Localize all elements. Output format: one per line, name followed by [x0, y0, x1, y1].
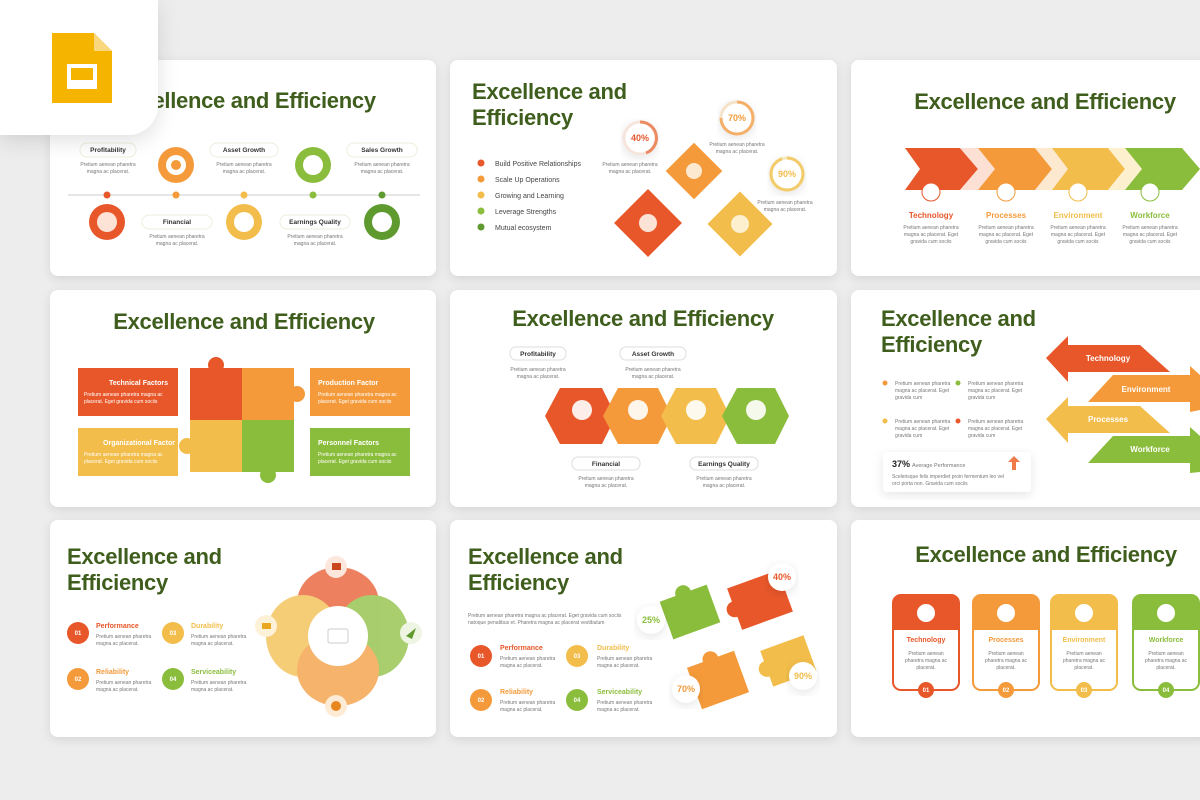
card 7: venn: 04: [170, 677, 177, 683]
card 9: column cards: 04: [1163, 688, 1170, 694]
card 3: chevrons: Environment: [1054, 211, 1103, 220]
card 9: column cards: Pretium aenean: [908, 651, 944, 657]
card 8: puzzle 4 percentages: 02: [478, 698, 485, 704]
card 2: puzzle percentages: Growing and Learning: [495, 193, 564, 200]
card 8: puzzle 4 percentages: magna ac placerat.: [597, 663, 640, 669]
card 6: arrows: Workforce: [1130, 445, 1170, 454]
card 6: arrows: 37%: [892, 459, 910, 469]
card 9: column cards: Pretium aenean: [1066, 651, 1102, 657]
card 9: column cards: [851, 520, 1200, 737]
card 6: arrows: magna ac placerat. Eget: [895, 426, 950, 432]
card 4: 2x2 puzzle: [50, 290, 436, 507]
card 2: puzzle percentages: 90%: [778, 169, 796, 179]
card 2: puzzle percentages: [450, 60, 837, 276]
card 3: chevrons: gravida cum sociis: [910, 239, 952, 245]
card 1: timeline: [50, 60, 436, 276]
card 8: puzzle 4 percentages: natoque penatibus et. Pharetra magna ac placerat vestibulum: [468, 620, 604, 626]
card 1: timeline: magna ac placerat.: [294, 241, 336, 247]
card 2: puzzle percentages: 70%: [728, 113, 746, 123]
card 2: puzzle percentages: Pretium aenean pharetra: [709, 142, 765, 148]
card 1: timeline: magna ac placerat.: [223, 169, 265, 175]
card 4: 2x2 puzzle: Pretium aenean pharetra magna ac: [318, 452, 397, 458]
card 8: puzzle 4 percentages: Pretium aenean pharetra: [500, 656, 556, 662]
card 8: puzzle 4 percentages: magna ac placerat.: [500, 663, 543, 669]
card 8: puzzle 4 percentages: 40%: [773, 572, 791, 582]
card 8: puzzle 4 percentages: Pretium aenean pharetra magna ac placerat. Eget gravida cum sociis: [468, 613, 622, 619]
card 2: puzzle percentages: Pretium aenean pharetra: [602, 162, 658, 168]
card 7: venn: magna ac placerat.: [191, 641, 234, 647]
card 6: arrows: Pretium aenean pharetra: [895, 381, 951, 387]
card 5: hexagons: magna ac placerat.: [703, 483, 745, 489]
card 2: puzzle percentages: 40%: [631, 133, 649, 143]
card 6: arrows: Pretium aenean pharetra: [968, 419, 1024, 425]
card 5: hexagons: magna ac placerat.: [517, 374, 559, 380]
card 4: 2x2 puzzle: Pretium aenean pharetra magna ac: [84, 392, 163, 398]
card 2: puzzle percentages: magna ac placerat.: [764, 207, 806, 213]
card 8: puzzle 4 percentages: 70%: [677, 684, 695, 694]
card 6: arrows: gravida cum: [968, 433, 995, 439]
card 3: chevrons: gravida cum sociis: [1129, 239, 1171, 245]
card 9: column cards: placerat.: [916, 665, 936, 671]
card 6: arrows: gravida cum: [968, 395, 995, 401]
card 7: venn: Efficiency: [67, 570, 169, 595]
card 6: arrows: gravida cum: [895, 433, 922, 439]
card 9: column cards: placerat.: [1156, 665, 1176, 671]
card 9: column cards: 02: [1003, 688, 1010, 694]
card 2: puzzle percentages: Mutual ecosystem: [495, 225, 552, 232]
card 7: venn: Pretium aenean pharetra: [96, 680, 152, 686]
card 9: column cards: Pretium aenean: [988, 651, 1024, 657]
card 1: timeline: magna ac placerat.: [156, 241, 198, 247]
card 2: puzzle percentages: Build Positive Relationships: [495, 161, 581, 168]
card 5: hexagons: Asset Growth: [632, 351, 674, 358]
card 5: hexagons: magna ac placerat.: [632, 374, 674, 380]
card 6: arrows: Scelerisque felis imperdiet proin fermentum leo vel: [892, 474, 1004, 480]
card 9: column cards: pharetra magna ac: [1145, 658, 1187, 664]
card 4: 2x2 puzzle: placerat. Eget gravida cum sociis: [318, 459, 392, 465]
card 4: 2x2 puzzle: Excellence and Efficiency: [113, 309, 376, 334]
card 3: chevrons: magna ac placerat. Eget: [904, 232, 959, 238]
card 7: venn: 01: [75, 631, 82, 637]
card 2: puzzle percentages: Leverage Strengths: [495, 209, 557, 216]
card 4: 2x2 puzzle: Pretium aenean pharetra magna ac: [318, 392, 397, 398]
card 7: venn: magna ac placerat.: [96, 687, 139, 693]
card 5: hexagons: Pretium aenean pharetra: [696, 476, 752, 482]
card 8: puzzle 4 percentages: Efficiency: [468, 570, 570, 595]
card 5: hexagons: Profitability: [520, 351, 556, 358]
card 1: timeline: Financial: [163, 219, 191, 226]
card 9: column cards: pharetra magna ac: [905, 658, 947, 664]
card 8: puzzle 4 percentages: Serviceability: [597, 689, 642, 696]
card 3: chevrons: Technology: [909, 211, 954, 220]
card 1: timeline: Pretium aenean pharetra: [149, 234, 205, 240]
card 9: column cards: placerat.: [996, 665, 1016, 671]
card 5: hexagons: Earnings Quality: [698, 461, 750, 468]
card 6: arrows: Pretium aenean pharetra: [895, 419, 951, 425]
card 8: puzzle 4 percentages: Reliability: [500, 689, 533, 696]
card 5: hexagons: Pretium aenean pharetra: [510, 367, 566, 373]
card 5: hexagons: Pretium aenean pharetra: [625, 367, 681, 373]
card 8: puzzle 4 percentages: [450, 520, 837, 737]
card 4: 2x2 puzzle: Production Factor: [318, 380, 379, 387]
card 5: hexagons: magna ac placerat.: [585, 483, 627, 489]
card 7: venn: Pretium aenean pharetra: [191, 634, 247, 640]
title: Excellence and Efficiency: [114, 88, 377, 113]
card 6: arrows: magna ac placerat. Eget: [895, 388, 950, 394]
card 6: arrows: Excellence and: [881, 306, 1036, 331]
card 3: chevrons: Pretium aenean pharetra: [1122, 225, 1178, 231]
card 4: 2x2 puzzle: Pretium aenean pharetra magna ac: [84, 452, 163, 458]
card 9: column cards: placerat.: [1074, 665, 1094, 671]
card 7: venn: 03: [170, 631, 177, 637]
card 3: chevrons: Pretium aenean pharetra: [978, 225, 1034, 231]
card 9: column cards: Excellence and Efficiency: [915, 542, 1178, 567]
card 7: venn: magna ac placerat.: [191, 687, 234, 693]
card 3: chevrons: Excellence and Efficiency: [914, 89, 1177, 114]
card 3: chevrons: magna ac placerat. Eget: [979, 232, 1034, 238]
card 1: timeline: Pretium aenean pharetra: [287, 234, 343, 240]
card 3: chevrons: [851, 60, 1200, 276]
card 8: puzzle 4 percentages: Durability: [597, 645, 629, 652]
card 7: venn: Performance: [96, 623, 139, 630]
card 6: arrows: [851, 290, 1200, 507]
card 6: arrows: Processes: [1088, 415, 1129, 424]
card 7: venn: magna ac placerat.: [96, 641, 139, 647]
card 9: column cards: Workforce: [1149, 637, 1183, 644]
card 9: column cards: pharetra magna ac: [1063, 658, 1105, 664]
card 5: hexagons: Pretium aenean pharetra: [578, 476, 634, 482]
card 9: column cards: 01: [923, 688, 930, 694]
card 8: puzzle 4 percentages: 01: [478, 654, 485, 660]
card 6: arrows: magna ac placerat. Eget: [968, 426, 1023, 432]
card 6: arrows: Technology: [1086, 354, 1131, 363]
card 8: puzzle 4 percentages: 25%: [642, 615, 660, 625]
card 6: arrows: Environment: [1122, 385, 1171, 394]
card 7: venn: 02: [75, 677, 82, 683]
card 6: arrows: Efficiency: [881, 332, 983, 357]
card 1: timeline: Sales Growth: [361, 147, 403, 154]
card 7: venn: Pretium aenean pharetra: [96, 634, 152, 640]
card 9: column cards: pharetra magna ac: [985, 658, 1027, 664]
card 7: venn: [50, 520, 436, 737]
card 5: hexagons: Excellence and Efficiency: [512, 306, 775, 331]
card 3: chevrons: magna ac placerat. Eget: [1051, 232, 1106, 238]
card 8: puzzle 4 percentages: magna ac placerat.: [500, 707, 543, 713]
card 2: puzzle percentages: Excellence and: [472, 79, 627, 104]
card 8: puzzle 4 percentages: 03: [574, 654, 581, 660]
card 8: puzzle 4 percentages: Pretium aenean pharetra: [597, 700, 653, 706]
card 5: hexagons: [450, 290, 837, 507]
card 6: arrows: orci porta non. Gravida cum sociis: [892, 481, 968, 487]
card 2: puzzle percentages: magna ac placerat.: [609, 169, 651, 175]
card 1: timeline: Pretium aenean pharetra: [80, 162, 136, 168]
card 3: chevrons: Pretium aenean pharetra: [1050, 225, 1106, 231]
card 8: puzzle 4 percentages: Pretium aenean pharetra: [597, 656, 653, 662]
card 7: venn: Serviceability: [191, 669, 236, 676]
card 5: hexagons: Financial: [592, 461, 620, 468]
card 4: 2x2 puzzle: placerat. Eget gravida cum sociis: [318, 399, 392, 405]
card 4: 2x2 puzzle: Technical Factors: [109, 380, 168, 387]
card 1: timeline: Earnings Quality: [289, 219, 341, 226]
card 9: column cards: 03: [1081, 688, 1088, 694]
card 1: timeline: Profitability: [90, 147, 126, 154]
card 8: puzzle 4 percentages: Performance: [500, 645, 543, 652]
card 4: 2x2 puzzle: Organizational Factor: [103, 440, 175, 447]
card 2: puzzle percentages: Scale Up Operations: [495, 177, 560, 184]
card 8: puzzle 4 percentages: Pretium aenean pharetra: [500, 700, 556, 706]
icon: google slides: [52, 33, 112, 103]
card 7: venn: Reliability: [96, 669, 129, 676]
card 3: chevrons: Pretium aenean pharetra: [903, 225, 959, 231]
card 6: arrows: gravida cum: [895, 395, 922, 401]
card 8: puzzle 4 percentages: magna ac placerat.: [597, 707, 640, 713]
card 1: timeline: magna ac placerat.: [361, 169, 403, 175]
card 7: venn: Excellence and: [67, 544, 222, 569]
card 9: column cards: Pretium aenean: [1148, 651, 1184, 657]
card 1: timeline: Asset Growth: [223, 147, 265, 154]
card 9: column cards: Processes: [988, 637, 1024, 644]
card 9: column cards: Environment: [1063, 637, 1106, 644]
card 3: chevrons: Processes: [986, 211, 1027, 220]
card 7: venn: Durability: [191, 623, 223, 630]
card 2: puzzle percentages: magna ac placerat.: [716, 149, 758, 155]
card 7: venn: Pretium aenean pharetra: [191, 680, 247, 686]
card 1: timeline: Pretium aenean pharetra: [216, 162, 272, 168]
card 6: arrows: magna ac placerat. Eget: [968, 388, 1023, 394]
card 9: column cards: Technology: [907, 637, 945, 644]
card 3: chevrons: gravida cum sociis: [985, 239, 1027, 245]
card 8: puzzle 4 percentages: 90%: [794, 671, 812, 681]
card 8: puzzle 4 percentages: 04: [574, 698, 581, 704]
card 4: 2x2 puzzle: placerat. Eget gravida cum sociis: [84, 399, 158, 405]
card 4: 2x2 puzzle: placerat. Eget gravida cum sociis: [84, 459, 158, 465]
card 2: puzzle percentages: Pretium aenean pharetra: [757, 200, 813, 206]
card 2: puzzle percentages: Efficiency: [472, 105, 574, 130]
card 4: 2x2 puzzle: Personnel Factors: [318, 440, 379, 447]
card 8: puzzle 4 percentages: Excellence and: [468, 544, 623, 569]
card 3: chevrons: magna ac placerat. Eget: [1123, 232, 1178, 238]
card 6: arrows: Pretium aenean pharetra: [968, 381, 1024, 387]
card 3: chevrons: Workforce: [1130, 211, 1170, 220]
card 1: timeline: magna ac placerat.: [87, 169, 129, 175]
card 3: chevrons: gravida cum sociis: [1057, 239, 1099, 245]
card 1: timeline: Pretium aenean pharetra: [354, 162, 410, 168]
card 6: arrows: Average Performance: [912, 463, 965, 469]
google slides badge: [0, 0, 158, 135]
